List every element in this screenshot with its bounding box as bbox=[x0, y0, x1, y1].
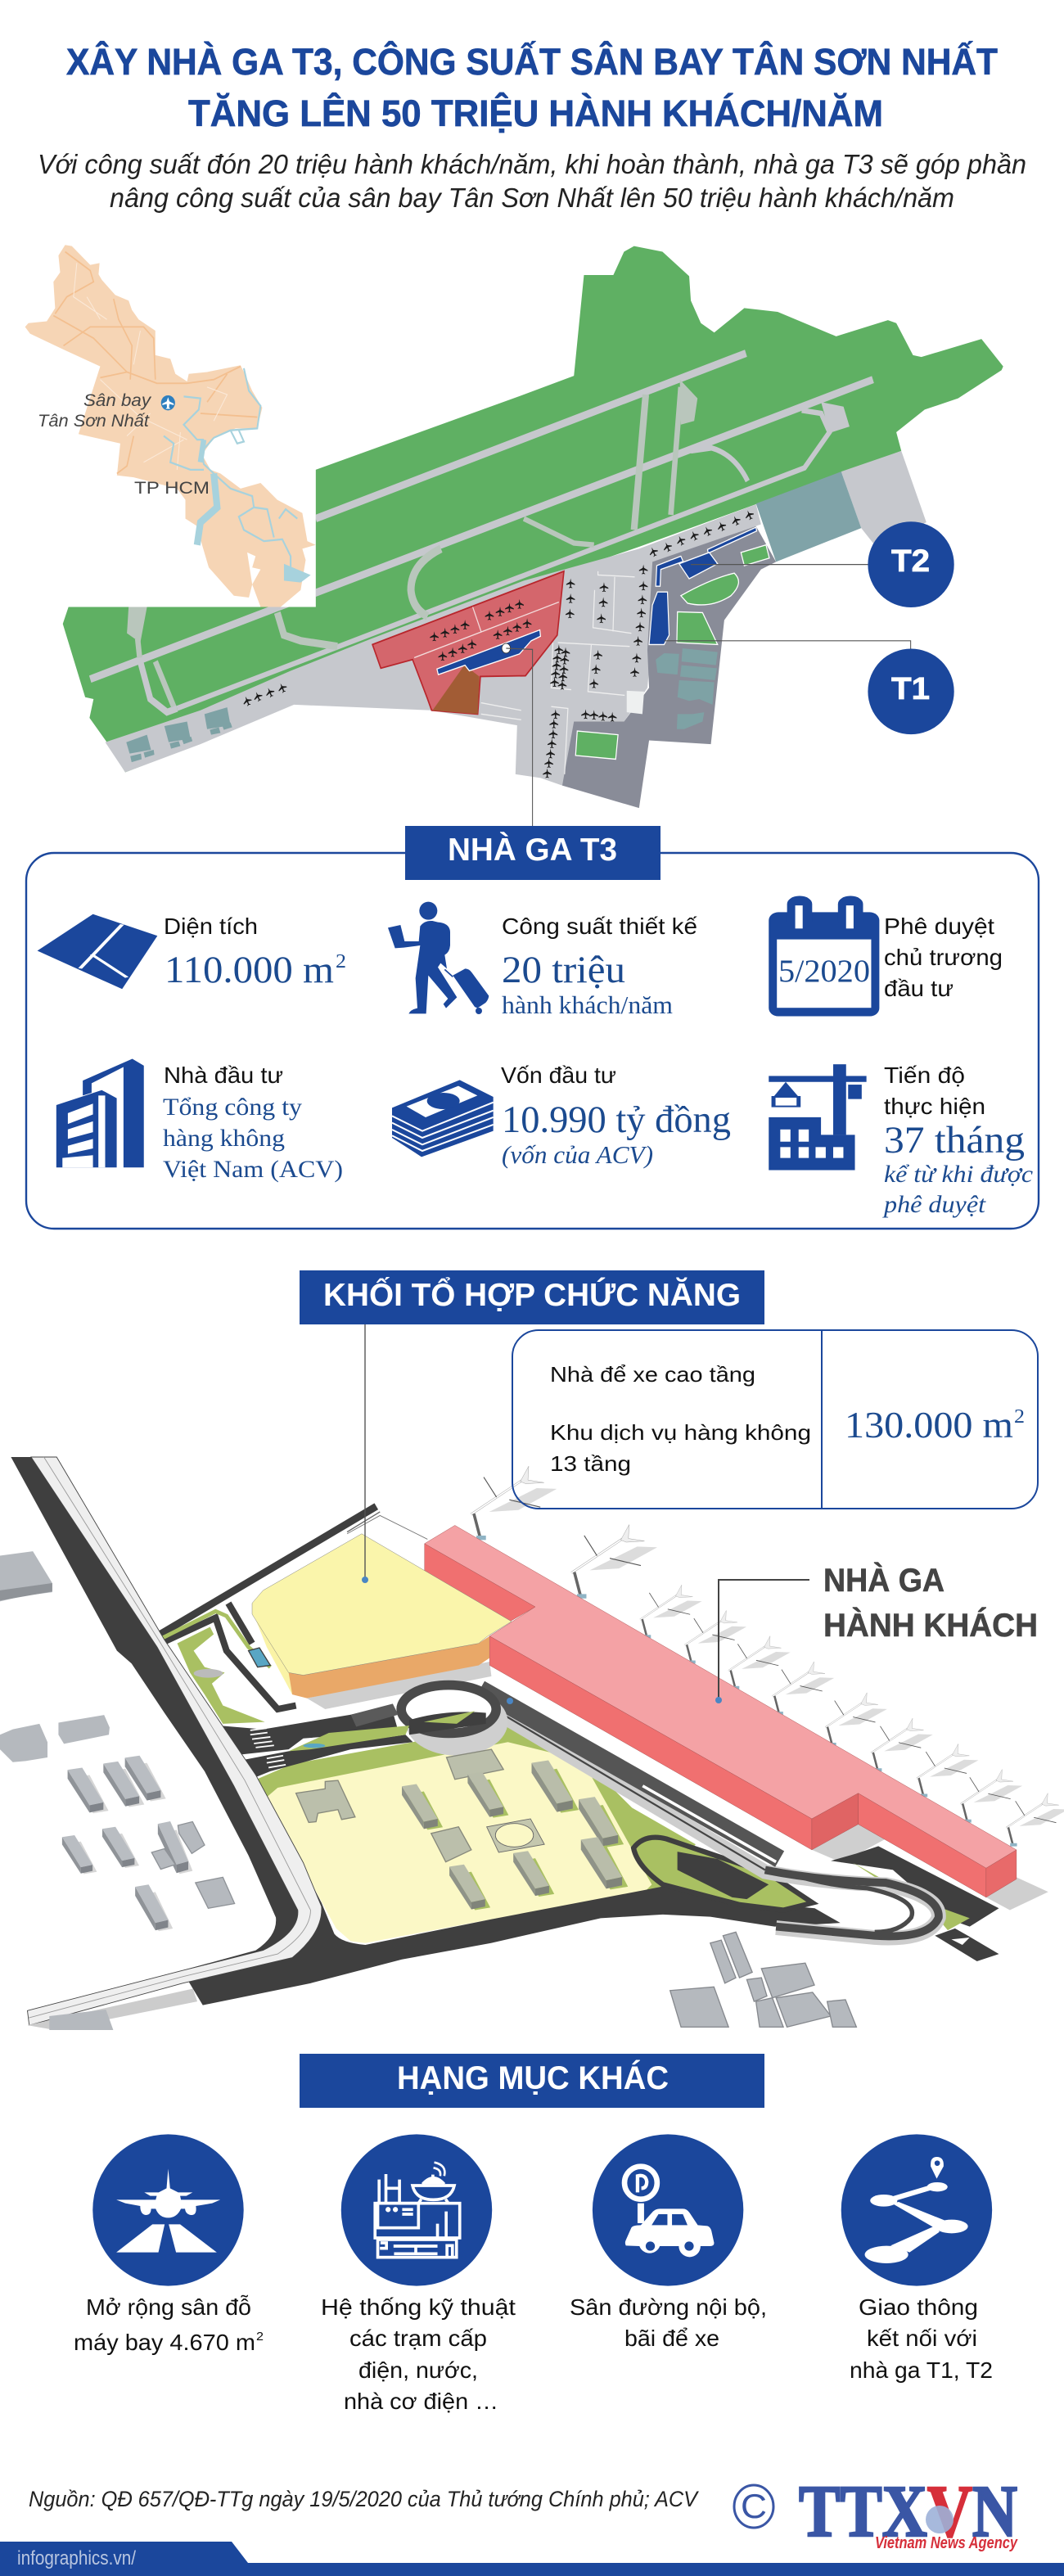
T2 and T1 terminals bbox=[649, 527, 756, 644]
text: technical systems: nhà cơ điện … bbox=[344, 2389, 498, 2414]
east apron bbox=[841, 451, 926, 545]
light apron bbox=[106, 504, 761, 786]
text: technical systems: Hệ thống kỹ thuật bbox=[321, 2294, 516, 2320]
heading bbox=[405, 826, 660, 880]
text: công suất thiết kế: Công suất thiết kế bbox=[502, 914, 697, 939]
panel: functional block area: 13 tầng bbox=[550, 1451, 631, 1476]
text: calendar date: 5/2020 bbox=[778, 954, 870, 989]
heading: hạng mục khác bbox=[300, 2054, 764, 2108]
ground: pale yellow plot bbox=[265, 1742, 651, 1943]
footer band bbox=[0, 2542, 1064, 2576]
campus buildings bbox=[296, 1749, 628, 1911]
leader: passenger terminal bbox=[507, 1580, 809, 1704]
text: transport links bbox=[850, 2294, 993, 2383]
inset: airport pin bbox=[161, 395, 175, 410]
T2 and T1 leader lines bbox=[506, 565, 911, 827]
inset labels: Sân bay bbox=[83, 391, 152, 410]
text: technical systems bbox=[321, 2294, 516, 2414]
T3 terminal bbox=[437, 630, 540, 674]
text: vốn đầu tư: (vốn của ACV) bbox=[502, 1140, 653, 1169]
text: apron expansion bbox=[74, 2294, 264, 2355]
text: nhà đầu tư bbox=[163, 1062, 343, 1183]
text: vốn đầu tư: 10.990 tỷ đồng bbox=[502, 1099, 731, 1141]
crosswalks bbox=[250, 1728, 286, 1767]
text: nhà đầu tư: hàng không bbox=[163, 1125, 285, 1152]
text: diện tích: 110.000 m bbox=[165, 949, 334, 991]
label: passenger terminal: NHÀ GA bbox=[823, 1562, 945, 1599]
text: technical systems: điện, nước, bbox=[358, 2357, 478, 2383]
inset: Ho Chi Minh City shape bbox=[25, 245, 316, 607]
apron stand lines bbox=[481, 571, 635, 774]
text: diện tích bbox=[164, 914, 346, 991]
text: diện tích: Diện tích bbox=[164, 914, 258, 939]
functional block: yellow building bbox=[252, 1610, 489, 1699]
ground: green verge bbox=[254, 1720, 696, 1941]
label: passenger terminal: HÀNH KHÁCH bbox=[823, 1607, 1038, 1644]
pond bbox=[249, 1648, 270, 1667]
text: nhà đầu tư: Việt Nam (ACV) bbox=[163, 1156, 343, 1183]
airside road bbox=[831, 1846, 999, 1927]
icon: office towers bbox=[56, 1059, 144, 1167]
roundabout bbox=[351, 1685, 507, 1756]
marker: T1 bbox=[868, 648, 954, 734]
text: transport links: kết nối với bbox=[867, 2326, 977, 2351]
inset labels: TP HCM bbox=[134, 479, 210, 498]
inset map background bbox=[0, 225, 316, 607]
subtitle bbox=[38, 149, 1026, 213]
inset: rivers bbox=[164, 368, 311, 583]
footer url: infographics.vn/ bbox=[17, 2547, 136, 2569]
panel: functional block area: 2 bbox=[1014, 1406, 1025, 1428]
text: vốn đầu tư bbox=[501, 1062, 731, 1169]
heading: khối tổ hợp chức năng: KHỐI TỔ HỢP CHỨC NĂNG bbox=[323, 1276, 741, 1313]
T1 label: T1 bbox=[891, 672, 930, 706]
title: TĂNG LÊN 50 TRIỆU HÀNH KHÁCH/NĂM bbox=[188, 92, 883, 134]
icon: floor area bbox=[38, 914, 157, 989]
panel: functional block area: 130.000 m bbox=[845, 1404, 1013, 1446]
passenger terminal block bbox=[425, 1525, 1017, 1897]
icon: crane over building bbox=[769, 1064, 867, 1171]
terminal complex 3D scene bbox=[0, 1457, 1064, 2030]
heading: NHÀ GA T3 bbox=[448, 832, 617, 868]
text: phê duyệt: đầu tư bbox=[884, 976, 954, 1001]
icon: technical station bbox=[341, 2134, 492, 2286]
terminal shadows bbox=[307, 1662, 491, 1709]
title: XÂY NHÀ GA T3, CÔNG SUẤT SÂN BAY TÂN SƠN NHẤT bbox=[66, 41, 998, 83]
text: công suất thiết kế: hành khách/năm bbox=[502, 990, 673, 1019]
title bbox=[66, 41, 998, 134]
panel: Nhà ga T3 bbox=[26, 826, 1039, 1229]
inset labels: Tân Sơn Nhất bbox=[38, 412, 150, 431]
text: technical systems: các trạm cấp bbox=[349, 2326, 487, 2351]
text: tiến độ bbox=[882, 1062, 1033, 1218]
text: diện tích: 2 bbox=[336, 951, 346, 972]
elevated road bbox=[27, 1457, 322, 2025]
text: transport links: Giao thông bbox=[859, 2294, 978, 2320]
text: nhà đầu tư: Tổng công ty bbox=[163, 1094, 302, 1121]
main road bbox=[11, 1457, 841, 2005]
panel: functional block area bbox=[512, 1330, 1038, 1509]
green airfield bbox=[63, 246, 1003, 773]
green loop bbox=[633, 1838, 813, 1911]
text: internal roads bbox=[570, 2294, 767, 2351]
copyright mark bbox=[734, 2485, 773, 2528]
leader: functional block bbox=[362, 1324, 368, 1583]
text: internal roads: bãi để xe bbox=[624, 2326, 719, 2351]
icon: parking and car bbox=[593, 2134, 743, 2286]
subtitle: Với công suất đón 20 triệu hành khách/năm, khi hoàn thành, nhà ga T3 sẽ góp phần bbox=[38, 149, 1026, 179]
aircraft bbox=[471, 1466, 1064, 1847]
text: transport links: nhà ga T1, T2 bbox=[850, 2357, 993, 2383]
icon: traveller bbox=[388, 902, 489, 1014]
neighbouring buildings bbox=[0, 1551, 235, 2030]
landscaping strip bbox=[163, 1611, 270, 1667]
subtitle: nâng công suất của sân bay Tân Sơn Nhất lên 50 triệu hành khách/năm bbox=[110, 183, 954, 213]
brown block bbox=[433, 665, 480, 714]
teal block bbox=[756, 471, 861, 562]
panel: functional block area: Nhà để xe cao tầng bbox=[550, 1362, 755, 1387]
median garden bbox=[289, 1726, 409, 1751]
text: tiến độ: kể từ khi được bbox=[884, 1161, 1033, 1188]
text: công suất thiết kế: 20 triệu bbox=[502, 949, 625, 991]
text: phê duyệt: Phê duyệt bbox=[884, 914, 994, 939]
text: apron expansion: máy bay 4.670 m bbox=[74, 2330, 255, 2355]
ramp road bbox=[480, 1689, 939, 1938]
inset labels bbox=[38, 391, 210, 498]
source: Nguồn: QĐ 657/QĐ-TTg ngày 19/5/2020 của Thủ tướng Chính phủ; ACV bbox=[29, 2487, 700, 2511]
parked planes bbox=[241, 508, 755, 778]
icon: money stack bbox=[392, 1080, 494, 1157]
teal buildings bbox=[126, 648, 718, 762]
text: tiến độ: phê duyệt bbox=[882, 1191, 986, 1218]
text: công suất thiết kế bbox=[502, 914, 697, 1019]
text: nhà đầu tư: Nhà đầu tư bbox=[164, 1062, 283, 1088]
access roads bbox=[157, 1506, 427, 1709]
text: tiến độ: Tiến độ bbox=[884, 1062, 965, 1088]
inset: roads bbox=[53, 252, 257, 473]
copyright mark: C bbox=[741, 2487, 767, 2525]
south buildings bbox=[670, 1932, 856, 2027]
icons bbox=[38, 896, 879, 1171]
text: tiến độ: 37 tháng bbox=[884, 1119, 1025, 1162]
green plots bbox=[575, 545, 769, 759]
dark apron bbox=[562, 526, 776, 808]
heading: khối tổ hợp chức năng bbox=[300, 1270, 764, 1324]
logo: TTXVN: Vietnam News Agency bbox=[875, 2534, 1018, 2552]
text: vốn đầu tư: Vốn đầu tư bbox=[501, 1062, 616, 1088]
T2 label: T2 bbox=[891, 544, 930, 579]
logo: TTXVN: TTXVN bbox=[799, 2471, 1017, 2552]
marker: T2 bbox=[868, 521, 954, 607]
taxiways bbox=[90, 354, 873, 712]
text: apron expansion: 2 bbox=[256, 2330, 264, 2344]
icon: apron plane bbox=[92, 2134, 244, 2286]
text: phê duyệt: chủ trương bbox=[884, 945, 1003, 970]
text: phê duyệt bbox=[884, 914, 1003, 1001]
T3 site bbox=[372, 571, 564, 714]
heading: hạng mục khác: HẠNG MỤC KHÁC bbox=[397, 2059, 669, 2096]
icon: route bbox=[841, 2134, 992, 2286]
text: internal roads: Sân đường nội bộ, bbox=[570, 2294, 767, 2320]
text: apron expansion: Mở rộng sân đỗ bbox=[86, 2294, 251, 2320]
text: tiến độ: thực hiện bbox=[884, 1094, 985, 1119]
park bbox=[178, 1627, 265, 1724]
icon: calendar bbox=[769, 896, 879, 1016]
label: passenger terminal bbox=[823, 1562, 1038, 1644]
airport map bbox=[0, 225, 1003, 827]
panel: functional block area: Khu dịch vụ hàng không bbox=[550, 1420, 811, 1445]
